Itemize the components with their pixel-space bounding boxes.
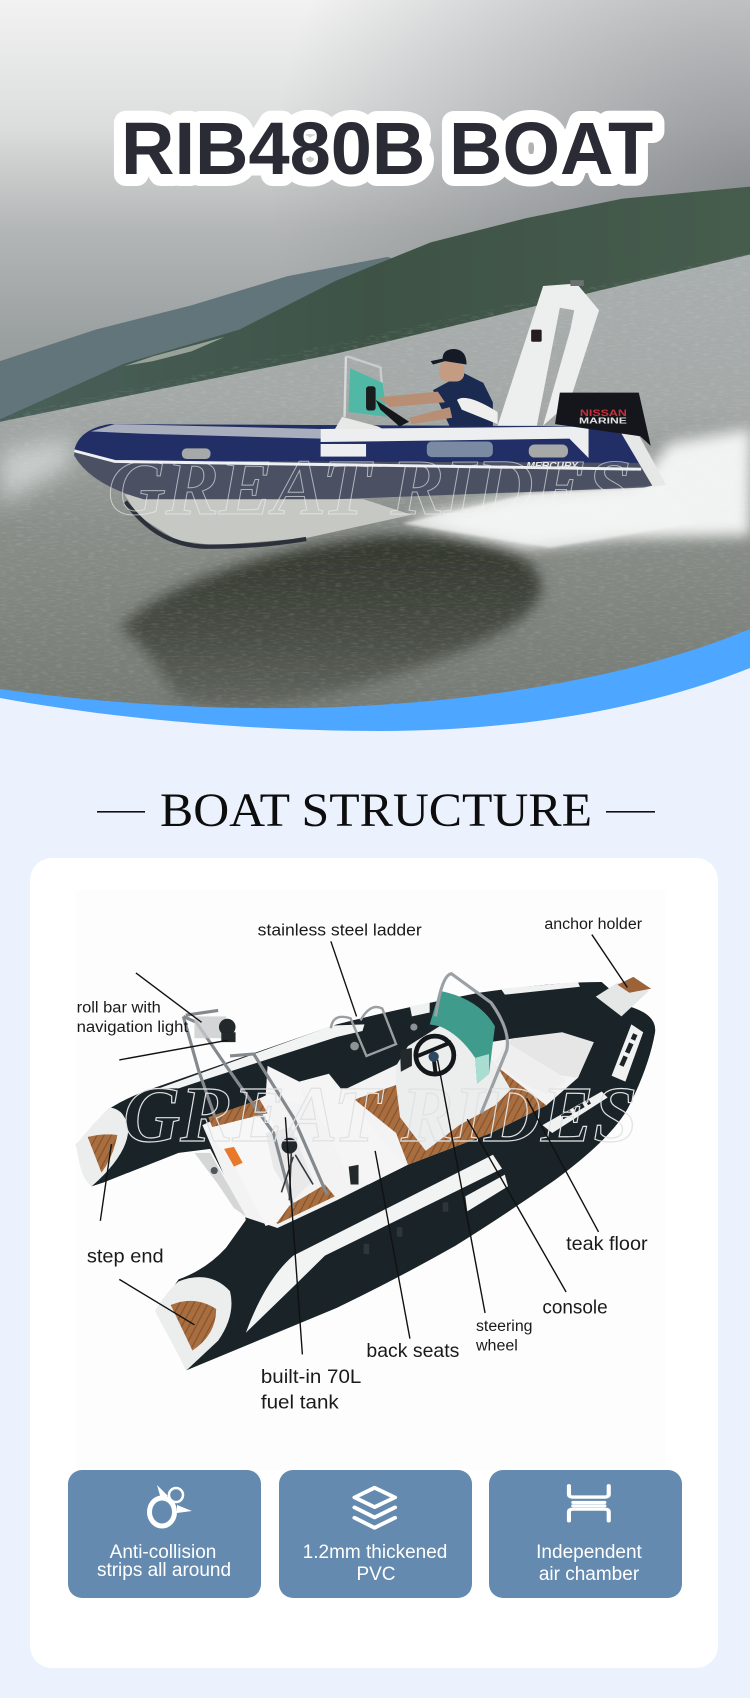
label: roll bar: roll bar with [77, 999, 161, 1016]
seat side [266, 1066, 305, 1105]
image backdrop [76, 890, 665, 1470]
card [30, 858, 718, 1668]
teak floor [355, 1062, 546, 1165]
spray over stern [402, 486, 654, 549]
label: anchor holder: anchor holder [544, 916, 642, 933]
tube handles [364, 1202, 448, 1254]
dark water reflection [120, 535, 542, 707]
console rail [436, 974, 507, 1113]
distant hills [0, 187, 750, 422]
watermark: GREAT RIDES [108, 443, 632, 532]
icon: air chamber [569, 1486, 609, 1521]
outboard motor: MARINE [579, 417, 628, 426]
feature card: air chamber [489, 1470, 682, 1598]
caption: strips all around [97, 1560, 231, 1581]
driver [378, 349, 493, 427]
title: RIB480B [121, 107, 425, 190]
white roll bar [457, 280, 599, 426]
caption: Independent [536, 1542, 643, 1563]
feature card: PVC [279, 1470, 472, 1598]
bow patches [501, 982, 580, 995]
part labels [77, 916, 648, 1413]
label: fuel tank: fuel tank [261, 1391, 339, 1413]
anchor holder [596, 983, 649, 1016]
panel: boat structure [30, 858, 718, 1668]
blue wave under hero photo [0, 620, 750, 731]
stainless roll bar [183, 1010, 327, 1208]
feature card: anti-collision [68, 1470, 261, 1598]
label: navigation light: navigation light [77, 1019, 189, 1036]
hull [124, 494, 412, 547]
water ripples [0, 254, 750, 708]
label: wheel: wheel [475, 1338, 518, 1355]
outboard motor: NISSAN [580, 408, 627, 418]
label: steering: steering [476, 1318, 533, 1335]
sky [0, 0, 750, 362]
console [396, 1026, 511, 1151]
orange light [224, 1147, 243, 1167]
label: built-in 70L: built-in 70L [261, 1366, 361, 1388]
icon: layers [355, 1488, 395, 1528]
icon: ring with spikes [150, 1485, 192, 1526]
inflatable tube [74, 424, 666, 499]
label: stainless steel ladder: stainless steel ladder [258, 920, 422, 939]
caption: 1.2mm thickened [303, 1542, 447, 1563]
section heading: BOAT STRUCTURE [160, 784, 592, 837]
bow seat [507, 1032, 594, 1078]
tube silhouette [76, 982, 655, 1370]
water [0, 254, 750, 708]
label: back seats: back seats [366, 1340, 459, 1362]
fuel tank rigging [281, 1138, 297, 1154]
label: step end: step end [87, 1245, 164, 1267]
caption: PVC [356, 1564, 396, 1585]
label: console: console [542, 1296, 608, 1318]
white stripes on tube [246, 1155, 502, 1333]
wake spray [0, 429, 750, 548]
white strip on far tube [159, 1024, 364, 1088]
inflatable tube: MERCURY [526, 461, 579, 471]
windshield [430, 991, 495, 1084]
boat diagram [76, 974, 655, 1370]
steering wheel [416, 1036, 454, 1074]
label: teak floor: teak floor [566, 1233, 648, 1255]
console and windshield [335, 356, 409, 429]
watermark: GREAT RIDES [123, 1072, 637, 1159]
rear box [202, 1113, 305, 1226]
caption: air chamber [539, 1564, 640, 1585]
caption: Anti-collision [110, 1542, 216, 1563]
title: BOAT [449, 107, 653, 190]
hero photo: boat on the water [0, 0, 750, 761]
rear seat [299, 1074, 404, 1184]
outboard motor [555, 393, 651, 446]
stern caps [76, 1107, 128, 1186]
stainless ladder [331, 1007, 396, 1056]
transom side [194, 1153, 246, 1216]
leader lines [100, 935, 627, 1354]
interior floor base [202, 1038, 594, 1228]
